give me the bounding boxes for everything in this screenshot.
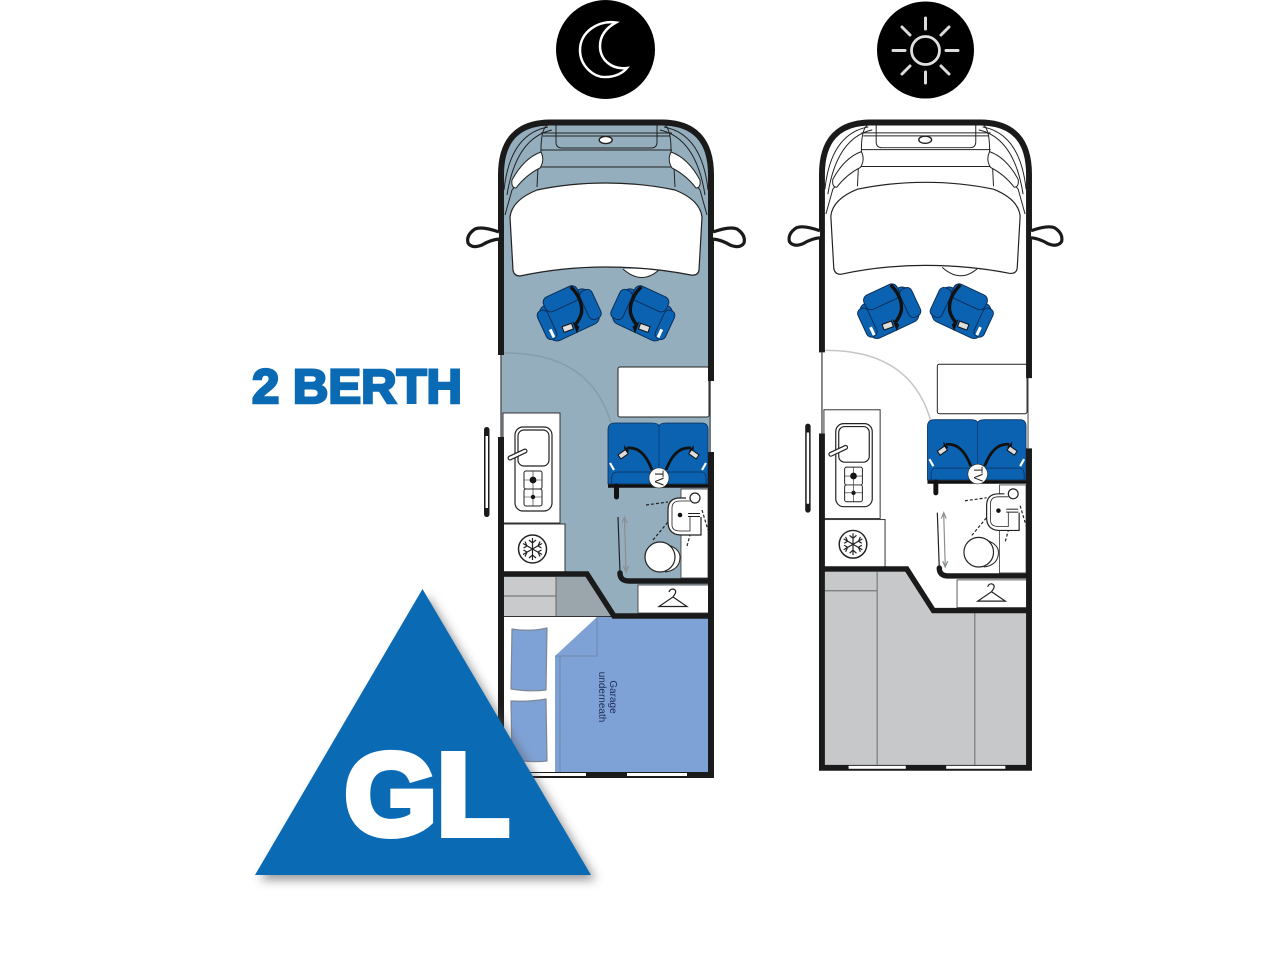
cab details bbox=[825, 125, 1026, 214]
badge shadow bbox=[260, 596, 596, 880]
rear bench seat bbox=[608, 423, 712, 497]
rear lounge and storage bbox=[825, 572, 1027, 765]
cabin floor bbox=[501, 122, 711, 616]
kitchen unit bbox=[503, 413, 560, 523]
panel: night layout floor plan bbox=[468, 122, 744, 776]
pillow lower bbox=[511, 699, 547, 762]
van outline bbox=[789, 122, 1062, 769]
badge triangle bbox=[255, 589, 591, 875]
dinette table bbox=[937, 364, 1027, 414]
washroom bbox=[937, 485, 1026, 573]
fridge bbox=[503, 524, 565, 572]
heading: 2 BERTH: 2 BERTH bbox=[252, 361, 462, 414]
icon: sun (day layout) bbox=[877, 2, 974, 98]
garage label: underneath bbox=[596, 672, 607, 722]
icon: moon (night layout) bbox=[556, 0, 655, 99]
cab details bbox=[504, 125, 708, 215]
rear double bed bbox=[504, 617, 709, 772]
door swing arc bbox=[824, 350, 930, 420]
wardrobe bbox=[638, 585, 709, 613]
rear bench seat bbox=[927, 420, 1030, 493]
wardrobe bbox=[957, 580, 1027, 608]
bed over cab bbox=[510, 183, 702, 278]
steps bbox=[503, 577, 612, 616]
fridge bbox=[824, 520, 885, 567]
door swing arc bbox=[503, 353, 611, 423]
badge: GL triangle bbox=[255, 589, 596, 880]
pillow upper bbox=[511, 628, 547, 691]
van outline bbox=[468, 122, 744, 776]
kitchen unit bbox=[824, 410, 880, 519]
washroom bbox=[618, 489, 708, 578]
panel: day layout floor plan bbox=[789, 122, 1062, 769]
interior walls bbox=[824, 568, 1029, 611]
cab seats bbox=[852, 277, 999, 343]
cab seats bbox=[531, 279, 681, 346]
badge text: GL bbox=[345, 730, 509, 860]
dinette table bbox=[618, 367, 709, 417]
front seats folded bed area bbox=[831, 182, 1020, 276]
interior walls bbox=[503, 573, 711, 616]
garage label: Garage bbox=[607, 680, 618, 714]
